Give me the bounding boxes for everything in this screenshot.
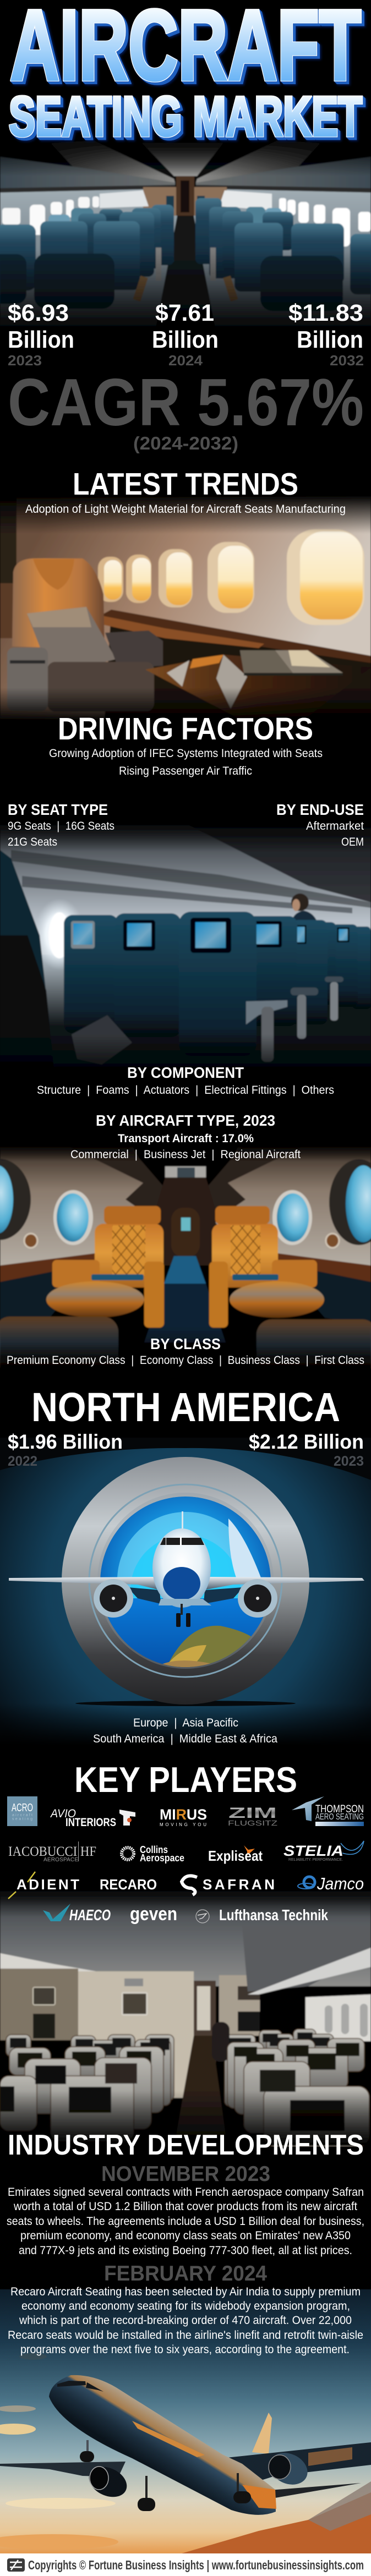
market size stat: 2032: Billion <box>297 326 363 353</box>
development text: Recaro and Air India <box>8 2285 363 2356</box>
segment: by aircraft type: Transport Aircraft : 17.0% <box>118 1132 254 1145</box>
segment: by class: BY CLASS <box>150 1335 221 1352</box>
stat: north america 2022 <box>8 1430 123 1469</box>
logo: Safran <box>182 1876 275 1895</box>
CAGR period: (2024-2032) <box>133 433 238 453</box>
market size stat: 2023: 2023 <box>8 352 42 369</box>
market size stat: 2024: 2024 <box>168 352 203 369</box>
logo: Mirus: MOVING YOU <box>160 1822 206 1827</box>
segment: by end-use: OEM <box>341 836 364 848</box>
segment: by class <box>7 1335 364 1367</box>
panel: screens cabin photo <box>0 821 371 1080</box>
airplane <box>0 2375 371 2515</box>
logo: Avio Interiors: AVIO <box>50 1807 76 1820</box>
logo: Thompson Aero Seating <box>292 1796 364 1826</box>
stat: north america 2022: $1.96 Billion <box>8 1430 123 1453</box>
logo: ACRO: ACRO <box>12 1802 33 1814</box>
logo: Stelia: STELIA <box>283 1843 343 1859</box>
title <box>9 0 362 148</box>
market size stat: 2032 <box>288 300 364 369</box>
stat: north america 2023: 2023 <box>334 1454 364 1469</box>
development text: Emirates and Safran: premium economy, and economy class seats on Emirates' new A350 <box>20 2229 351 2242</box>
logo: ZIM Flugsitz: ZIM <box>228 1805 277 1821</box>
logo: Haeco <box>43 1904 111 1923</box>
logo: Mirus: MIRUS <box>160 1806 207 1823</box>
heading: latest trends: LATEST TRENDS <box>73 467 298 502</box>
development date: February 2024: FEBRUARY 2024 <box>104 2262 267 2285</box>
right leather seat <box>209 1206 324 1328</box>
segment: by component <box>37 1064 334 1097</box>
logo: Collins Aerospace <box>122 1844 184 1864</box>
other regions: Europe | Asia Pacific <box>133 1717 238 1729</box>
development text: Recaro and Air India: which is part of the record-breaking order of 470 aircraft. Over 22,000 <box>19 2314 352 2327</box>
logo: Lufthansa Technik: Lufthansa Technik <box>219 1906 328 1923</box>
figure: standing passenger <box>291 894 319 935</box>
latest trend text: Adoption of Light Weight Material for Aircraft Seats Manufacturing <box>25 503 346 516</box>
market size stat: 2023 <box>8 300 74 369</box>
market size stat: 2024 <box>152 300 219 369</box>
segment: by seat type: 9G Seats | 16G Seats <box>8 820 114 832</box>
logo: Avio Interiors <box>50 1807 135 1829</box>
segment: by end-use: BY END-USE <box>276 801 364 818</box>
development text: Emirates and Safran: worth a total of USD 1.2 Billion that cover products from its new aircraft <box>13 2200 357 2213</box>
market size stat: 2032: 2032 <box>330 352 364 369</box>
panel: luxury seat photo <box>0 495 371 721</box>
logo: Stelia: RELIABILITY. PERFORMANCE. <box>288 1858 343 1862</box>
segment: by component: BY COMPONENT <box>127 1064 244 1081</box>
logo: Recaro: RECARO <box>100 1876 157 1893</box>
airplane front view <box>9 1511 364 1627</box>
logo: Iacobucci HF: AEROSPACE <box>43 1857 78 1863</box>
development text: Recaro and Air India: programs over the next five to six years, according to the agreement. <box>20 2343 350 2356</box>
logo: Collins Aerospace: Aerospace <box>140 1852 184 1864</box>
heading: key players: KEY PLAYERS <box>74 1760 297 1800</box>
icon: Fortune Business Insights mark <box>7 2558 25 2572</box>
logo: ZIM Flugsitz <box>228 1805 277 1827</box>
logo: Adient: ADIENT <box>17 1876 79 1893</box>
logo: Jamco <box>298 1874 364 1893</box>
logo: ACRO: seating <box>12 1817 32 1821</box>
far seat rows <box>6 2029 334 2106</box>
development text: Recaro and Air India: economy and economy seating for its widebody expansion program, <box>21 2300 350 2312</box>
logo: ZIM Flugsitz: FLUGSITZ <box>228 1819 277 1827</box>
near seat rows <box>0 2058 369 2147</box>
logo: Safran: SAFRAN <box>203 1876 275 1893</box>
heading: driving factors: DRIVING FACTORS <box>58 711 313 747</box>
market size stat: 2023: Billion <box>8 326 74 353</box>
market size stat: 2023: $6.93 <box>8 300 69 326</box>
segment: by aircraft type: Commercial | Business Jet | Regional Aircraft <box>70 1148 301 1161</box>
left leather seat <box>46 1206 164 1328</box>
other regions <box>93 1717 277 1745</box>
logo: Haeco: HAECO <box>69 1906 111 1923</box>
market size stat: 2024: $7.61 <box>155 300 214 326</box>
segment: by end-use: Aftermarket <box>306 820 364 832</box>
driving factor 1: Growing Adoption of IFEC Systems Integrated with Seats <box>49 747 323 760</box>
middle seat rows <box>9 2038 364 2114</box>
window glass with sky <box>99 1497 272 1670</box>
logo: Avio Interiors: INTERIORS <box>66 1816 116 1829</box>
segment: by seat type: BY SEAT TYPE <box>8 801 108 818</box>
logo: Iacobucci HF <box>8 1841 96 1863</box>
development text: Emirates and Safran: and 777X-9 jets and its existing Boeing 777-300 fleet, all at list prices. <box>19 2244 352 2257</box>
logo: Stelia <box>283 1841 364 1862</box>
segment: by aircraft type <box>70 1112 301 1161</box>
window ring <box>62 1457 309 1704</box>
market size stat: 2024: Billion <box>152 326 219 353</box>
panel: cabin photo header <box>0 138 371 331</box>
segment: by end-use <box>276 801 364 848</box>
other regions: South America | Middle East & Africa <box>93 1733 277 1745</box>
panel: private jet cabin photo <box>0 1145 371 1373</box>
market size stat: 2032: $11.83 <box>288 300 363 326</box>
segment: by aircraft type: BY AIRCRAFT TYPE, 2023 <box>96 1112 275 1129</box>
segment: by seat type: 21G Seats <box>8 836 57 848</box>
logo: Collins Aerospace: Collins <box>140 1844 168 1855</box>
panel: airplane in sunset sky <box>0 2289 371 2553</box>
segment: by seat type <box>8 801 114 848</box>
panel: economy cabin photo <box>0 1884 371 2147</box>
stat: north america 2023: $2.12 Billion <box>249 1430 364 1453</box>
heading: north america: NORTH AMERICA <box>31 1384 340 1430</box>
logo: ACRO: aircraft <box>12 1813 32 1817</box>
footer <box>0 2553 371 2576</box>
logo: Jamco: Jamco <box>317 1874 364 1893</box>
logo: Lufthansa Technik <box>196 1906 328 1923</box>
stat: north america 2023 <box>249 1430 364 1469</box>
logo: Geven: geven <box>130 1904 177 1925</box>
logo: Adient <box>8 1872 79 1899</box>
logo: Expliseat: Expliseat <box>208 1848 263 1864</box>
panel: regional illustration <box>0 1438 371 1745</box>
segment: by component: Structure | Foams | Actuators | Electrical Fittings | Others <box>37 1084 334 1097</box>
logo: Iacobucci HF: IACOBUCCI HF <box>8 1844 96 1859</box>
logo: ACRO <box>7 1796 37 1826</box>
development text: Emirates and Safran <box>7 2186 364 2257</box>
stat: north america 2022: 2022 <box>8 1454 37 1469</box>
driving factor 2: Rising Passenger Air Traffic <box>119 765 252 777</box>
development date: November 2023: NOVEMBER 2023 <box>101 2162 270 2186</box>
